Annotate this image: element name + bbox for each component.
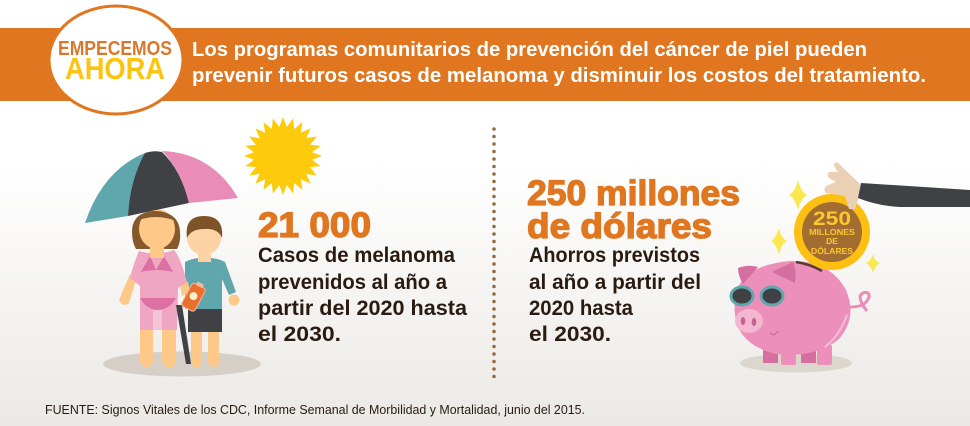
- stat description: prevenidos al año a: [258, 271, 447, 294]
- umbrella canopy: [85, 151, 238, 223]
- stat description: partir del 2020 hasta: [258, 297, 467, 320]
- snout: [735, 309, 763, 333]
- coin: MILLONES: [809, 227, 855, 237]
- stat description: [258, 244, 467, 346]
- stat: 250 millones de dólares: [527, 174, 740, 346]
- stat description: el 2030.: [258, 323, 341, 346]
- coin: DÓLARES: [811, 245, 853, 256]
- badge: empecemos ahora: EMPECEMOS: [58, 38, 172, 60]
- banner message: [192, 38, 926, 87]
- mother: [119, 209, 190, 367]
- stat description: 2020 hasta: [529, 297, 633, 320]
- sunglasses: [731, 287, 783, 305]
- pig body: [734, 261, 850, 355]
- stat description: al año a partir del: [529, 271, 701, 294]
- source note: FUENTE: Signos Vitales de los CDC, Informe Semanal de Morbilidad y Mortalidad, junio del 2015.: [45, 403, 585, 417]
- coin: 250: [813, 209, 851, 230]
- child: [185, 216, 240, 367]
- umbrella handle: [176, 305, 191, 364]
- badge: empecemos ahora: AHORA: [65, 51, 165, 86]
- pig ears: [738, 266, 758, 284]
- stat description: Casos de melanoma: [258, 244, 455, 267]
- icon: sun: [244, 117, 322, 195]
- hand and sleeve: [824, 162, 970, 209]
- stat description: [529, 244, 701, 346]
- pig legs: [763, 345, 832, 365]
- banner message: Los programas comunitarios de prevención del cáncer de piel pueden: [192, 38, 867, 61]
- pig tail: [850, 292, 869, 311]
- coin: [794, 194, 870, 270]
- coin slot: [796, 262, 822, 271]
- stat: 250 millones de dólares: de dólares: [527, 207, 712, 246]
- banner message: prevenir futuros casos de melanoma y disminuir los costos del tratamiento.: [192, 64, 926, 87]
- body highlight: [825, 315, 847, 347]
- stat description: el 2030.: [529, 323, 611, 346]
- sparkles: [771, 180, 880, 273]
- illustration: piggy bank with coin and hand: [731, 162, 970, 372]
- dotted divider: [492, 129, 496, 382]
- header banner: [0, 28, 970, 101]
- smile: [770, 331, 778, 335]
- ground shadow: [740, 354, 852, 372]
- coin: DE: [826, 236, 838, 246]
- ground shadow: [103, 352, 261, 376]
- stat description: Ahorros previstos: [529, 244, 700, 267]
- stat: 250 millones de dólares: 250 millones: [527, 174, 740, 213]
- illustration: mother and child under umbrella: [85, 151, 261, 376]
- stat: 21 000: 21 000: [258, 206, 371, 245]
- sunscreen bottle: [181, 280, 208, 312]
- stat: 21 000: [258, 206, 467, 346]
- badge: empecemos ahora: [49, 6, 183, 114]
